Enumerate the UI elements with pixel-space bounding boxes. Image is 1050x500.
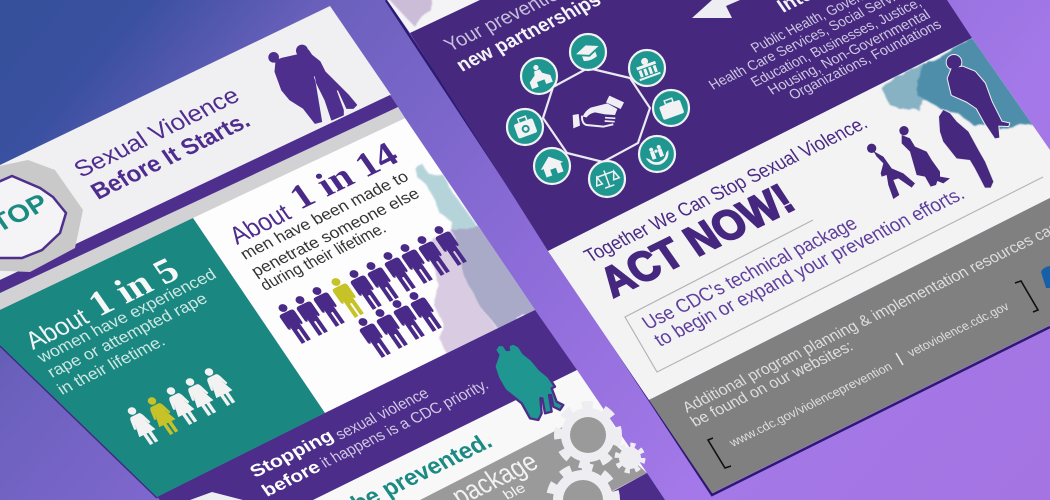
callout box outline — [625, 177, 1043, 372]
chart: pictogram of women — [122, 365, 239, 447]
stat: 1 in 14 men: About — [223, 198, 297, 250]
icon: family silhouettes — [867, 55, 1009, 199]
watercolor wash — [415, 165, 538, 355]
icon: scales of justice — [593, 166, 621, 191]
text: additional resources: be found on our websites: — [688, 338, 857, 430]
diagram: partnership network — [507, 34, 689, 197]
icon: house — [537, 152, 566, 179]
chart: pictogram of men — [273, 223, 470, 359]
icon: school — [525, 61, 553, 89]
text: sector list: Housing, Non-Governmental — [765, 7, 934, 98]
stat: 1 in 14 men: penetrate someone else — [248, 185, 423, 280]
right flyer card — [385, 0, 1050, 495]
card shadow — [386, 0, 1050, 495]
purple priority band — [157, 310, 577, 500]
stat: 1 in 14 men: men have been made to — [237, 168, 412, 263]
text: websites: www.cdc.gov/violenceprevention — [726, 360, 895, 450]
blue logo edge — [1041, 266, 1050, 288]
icon: camera case — [512, 114, 537, 139]
card edge shadow — [0, 346, 157, 498]
heading: before it starts: Sexual Violence — [69, 82, 245, 183]
stat: 1 in 14 men: 1 in 14 — [282, 134, 405, 217]
teal statistic panel — [0, 218, 325, 497]
connector octagon — [543, 68, 650, 162]
stat: 1 in 5 women: 1 in 5 — [81, 250, 187, 324]
icon: small white arrow — [190, 492, 243, 500]
figure: boy — [867, 144, 915, 199]
text: websites — [726, 299, 1012, 450]
heading: act now: ACT NOW! — [591, 176, 803, 306]
gray package box — [420, 410, 647, 500]
stat: 1 in 5 women: About — [19, 302, 95, 355]
white action panel — [548, 38, 1050, 400]
stat: 1 in 14 men — [223, 134, 423, 294]
white statistic panel — [193, 118, 535, 413]
left flyer card — [0, 6, 665, 500]
stat: 1 in 5 women: rape or attempted rape — [44, 290, 211, 381]
icon: stop octagon — [0, 160, 83, 272]
figure: man — [947, 55, 1009, 138]
text: sector list: Organizations, Foundations — [786, 17, 945, 103]
stat: 1 in 5 women: in their lifetime. — [54, 332, 169, 398]
watercolor wash — [880, 38, 1037, 130]
hatched stripe — [0, 107, 405, 310]
purple stripe — [0, 95, 398, 293]
white prevented band — [313, 370, 647, 500]
text: stopping sexual violence — [246, 377, 492, 500]
icon: family in hands — [643, 142, 672, 168]
icon: white arrow — [692, 0, 740, 18]
header band — [0, 6, 391, 280]
top white sliver with wash — [385, 0, 480, 33]
icon: teal couple silhouette — [494, 343, 563, 420]
bracket left — [708, 438, 731, 468]
purple partnerships panel — [410, 0, 972, 251]
text: stopping sexual violence: Stopping — [246, 426, 337, 481]
figure: girl — [899, 126, 950, 187]
icon: handshake — [573, 96, 624, 128]
text: stopping sexual violence: sexual violence — [333, 385, 432, 443]
icon: briefcase — [658, 96, 684, 120]
icon: capitol building — [633, 54, 661, 81]
icon: gears — [550, 405, 643, 500]
sector nodes — [507, 34, 689, 197]
text: use technical package: to begin or expand your prevention efforts. — [650, 183, 969, 351]
figure: woman — [939, 110, 993, 188]
bracket right — [1015, 281, 1038, 312]
stat: 1 in 5 women — [19, 250, 220, 398]
gray resources panel — [649, 198, 1050, 493]
heading: before it starts: Before It Starts. — [86, 108, 255, 205]
text: use technical package: Use CDC's technical package — [638, 213, 861, 334]
bottom purple strip — [597, 473, 665, 500]
text: websites: vetoviolence.cdc.gov — [905, 299, 1012, 359]
stat: 1 in 5 women: women have experienced — [33, 266, 220, 367]
icon: graduation cap — [574, 41, 602, 64]
icon: couple silhouette — [268, 45, 357, 123]
text: stopping sexual violence: it happens is a CDC priority. — [318, 377, 492, 471]
text: stopping sexual violence: before — [258, 457, 324, 500]
text: together we can: Together We Can Stop Sexual Violence. — [580, 113, 872, 267]
stat: 1 in 14 men: during their lifetime. — [257, 220, 390, 294]
